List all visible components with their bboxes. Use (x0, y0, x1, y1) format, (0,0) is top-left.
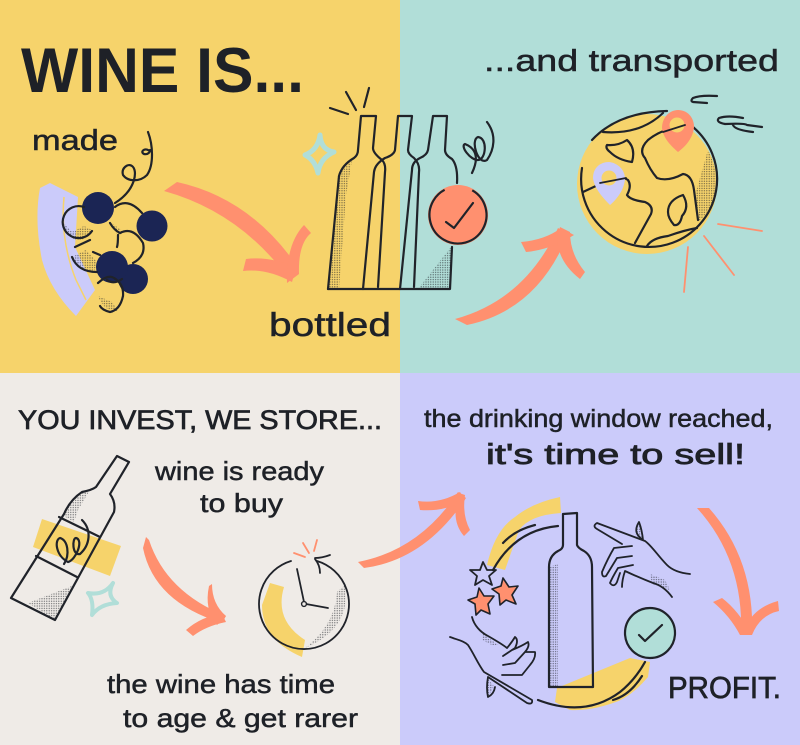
icon: three bottles (328, 88, 493, 289)
icon: sparkle (305, 135, 334, 173)
text: wine is ready to buy (154, 456, 324, 518)
stars (468, 562, 518, 615)
label: made: made (32, 125, 118, 157)
text: wine is ready to buy: to buy (200, 488, 283, 518)
text: time to sell: it's time to sell! (486, 439, 745, 471)
panel: transported (400, 0, 800, 373)
heading: you invest, we store: YOU INVEST, WE STORE... (18, 405, 382, 435)
check badge (625, 608, 675, 658)
panel: you invest, we store (0, 373, 400, 745)
arrow: ready to buy to clock (143, 537, 226, 636)
arrow: made to bottled (164, 182, 311, 283)
icon: check badge (419, 176, 497, 254)
icon: clock (259, 540, 349, 657)
label: profit: PROFIT. (668, 670, 781, 705)
bottle (549, 513, 593, 687)
arrow: bottled to transported (455, 227, 585, 325)
label: bottled: bottled (269, 306, 391, 343)
text: the wine has time to age (107, 669, 358, 733)
text: drinking window reached: the drinking window reached, (424, 405, 773, 433)
arrow: clock to sell (358, 492, 470, 568)
icon: grape bunch (37, 132, 167, 316)
heading: wine is: WINE IS... (21, 36, 304, 106)
label: and transported: ...and transported (484, 43, 779, 78)
circular arrows (493, 525, 645, 707)
icon: tilted wine bottle (11, 456, 129, 620)
panel: wine is made and bottled (0, 0, 400, 373)
icon: globe (577, 96, 762, 292)
arrow: sell to profit (697, 508, 779, 635)
icon: wine cycle illustration (450, 497, 690, 710)
text: wine is ready to buy: wine is ready (154, 456, 324, 486)
text: the wine has time to age: to age & get rarer (123, 703, 358, 733)
hand: upper (482, 522, 690, 697)
text: the wine has time to age: the wine has time (107, 669, 335, 699)
hand: lower (450, 617, 535, 704)
brush strokes (487, 497, 650, 710)
panel: time to sell (400, 373, 800, 745)
